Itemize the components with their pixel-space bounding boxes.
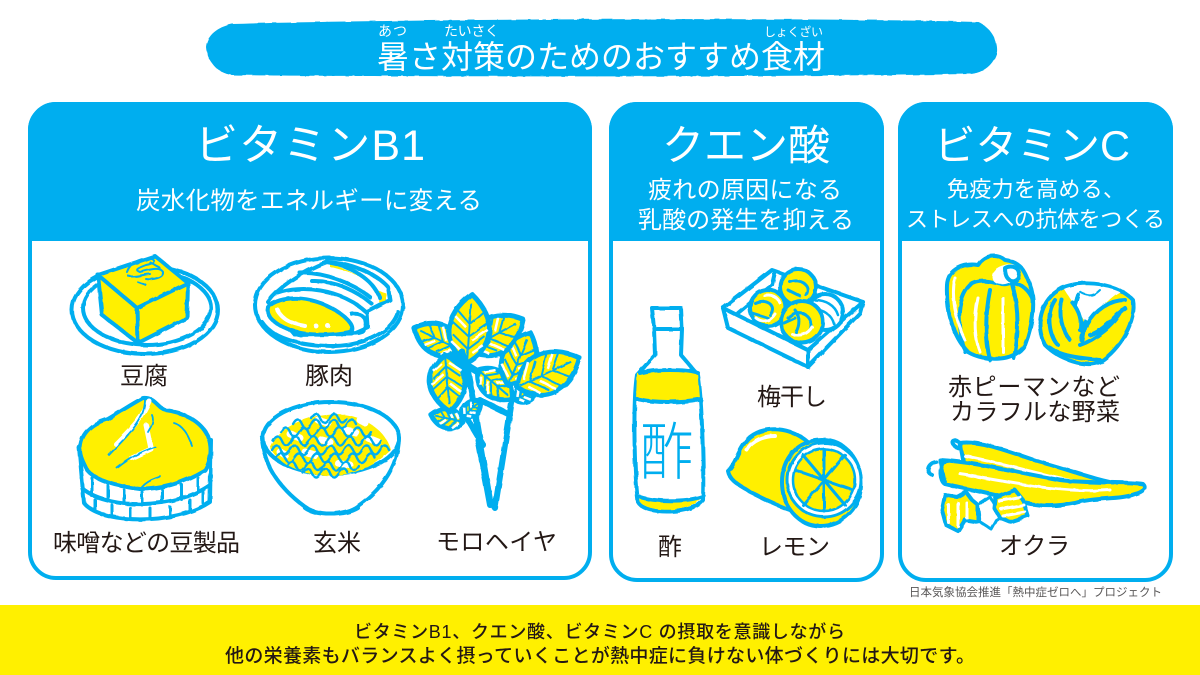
title ruby: たいさく xyxy=(444,23,499,39)
title ruby: しょくざい xyxy=(764,24,823,39)
icon: miso xyxy=(79,398,211,519)
label: tofu: 豆腐 xyxy=(120,363,168,390)
label: okra: オクラ xyxy=(999,533,1070,560)
icon: moroheiya xyxy=(408,293,588,508)
label: colorful vegetables xyxy=(948,374,1120,426)
icon: tofu xyxy=(72,256,218,354)
label: colorful vegetables: カラフルな野菜 xyxy=(950,399,1120,426)
title ruby: あつ xyxy=(378,23,407,39)
icon: brown rice xyxy=(262,402,399,514)
heading: citric acid: クエン酸 xyxy=(662,122,830,169)
subheading: citric acid: 疲れの原因になる xyxy=(648,177,842,204)
bottle label text: 酢 xyxy=(640,418,694,488)
source credit: 日本気象協会推進「熱中症ゼロへ」プロジェクト xyxy=(909,585,1162,599)
footer text: ビタミンB1、クエン酸、ビタミンC の摂取を意識しながら xyxy=(354,621,845,642)
footer text: 他の栄養素もバランスよく摂っていくことが熱中症に負けない体づくりには大切です。 xyxy=(225,645,975,667)
icon: pork xyxy=(255,258,403,352)
title banner xyxy=(206,19,997,76)
icon: bell peppers xyxy=(947,256,1134,364)
label: moroheiya: モロヘイヤ xyxy=(436,529,557,556)
panel: vitamin C xyxy=(900,104,1171,580)
panel: vitamin B1 xyxy=(30,104,590,578)
icon: vinegar bottle xyxy=(634,308,703,512)
label: miso and soy products: 味噌などの豆製品 xyxy=(53,530,240,557)
subheading: citric acid xyxy=(638,177,854,234)
label: umeboshi: 梅干し xyxy=(757,384,827,411)
panel: citric acid xyxy=(611,104,882,580)
heading: vitamin B1: ビタミンB1 xyxy=(195,122,425,170)
footer band xyxy=(0,605,1200,675)
title ruby xyxy=(378,23,823,39)
icon: lemon xyxy=(728,429,861,526)
heading: vitamin C: ビタミンC xyxy=(934,122,1130,169)
subheading: vitamin C: ストレスへの抗体をつくる xyxy=(906,207,1165,232)
subheading: citric acid: 乳酸の発生を抑える xyxy=(638,207,854,234)
title text: 暑さ対策のためのおすすめ食材 xyxy=(377,39,825,75)
footer text xyxy=(225,621,975,667)
subheading: B1: 炭水化物をエネルギーに変える xyxy=(136,187,482,215)
label: brown rice: 玄米 xyxy=(313,530,361,557)
label: lemon: レモン xyxy=(759,534,830,561)
subheading: vitamin C xyxy=(906,177,1165,232)
subheading: vitamin C: 免疫力を高める、 xyxy=(947,177,1125,202)
icon: umeboshi xyxy=(723,269,863,367)
icon: okra xyxy=(928,440,1145,531)
label: pork: 豚肉 xyxy=(305,363,353,390)
label: vinegar: 酢 xyxy=(658,534,682,561)
label: colorful vegetables: 赤ピーマンなど xyxy=(948,374,1120,401)
